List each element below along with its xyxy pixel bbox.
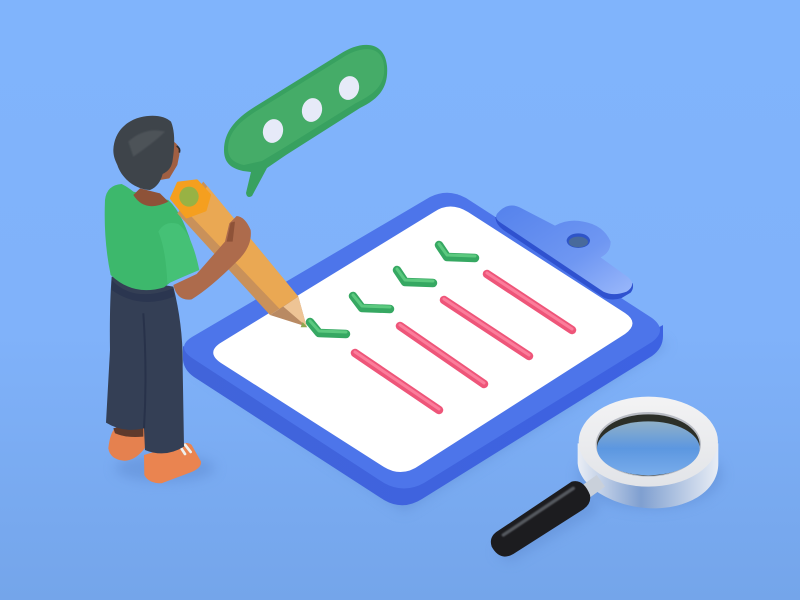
clipboard xyxy=(183,193,663,505)
glasses xyxy=(177,146,180,153)
lens rim side xyxy=(578,443,718,508)
pencil eraser end xyxy=(172,181,209,217)
clip xyxy=(495,205,633,300)
person with pencil xyxy=(105,116,307,483)
face xyxy=(160,140,179,180)
bubble dots xyxy=(260,74,362,145)
checkmarks xyxy=(310,244,475,334)
forearm and hand xyxy=(173,216,251,300)
clipboard board top xyxy=(184,193,660,488)
floor shadows xyxy=(115,330,722,562)
clip hole xyxy=(567,233,590,248)
pencil wood tip xyxy=(270,297,307,327)
t-shirt xyxy=(105,184,199,290)
shoes xyxy=(108,418,201,483)
paper sheet xyxy=(213,206,632,472)
sleeve xyxy=(158,223,199,283)
clipboard board side xyxy=(183,325,663,505)
lens dark crescent xyxy=(597,414,700,476)
bubble body xyxy=(224,45,387,197)
ferrule xyxy=(583,475,605,497)
pencil facet xyxy=(190,186,298,309)
bubble face xyxy=(228,49,384,165)
speech bubble xyxy=(224,45,387,197)
lens rim xyxy=(579,397,718,487)
hair xyxy=(113,116,174,190)
pencil body xyxy=(177,182,298,315)
clip edge xyxy=(495,210,633,300)
trousers xyxy=(106,277,184,453)
handle xyxy=(491,481,590,557)
magnifying glass xyxy=(491,397,718,557)
pencil xyxy=(172,181,307,327)
neck xyxy=(133,188,168,206)
pink list lines xyxy=(355,273,572,410)
lens glass xyxy=(597,421,700,475)
lens rim inner shade xyxy=(596,412,701,477)
clip plate with ring xyxy=(496,205,632,294)
